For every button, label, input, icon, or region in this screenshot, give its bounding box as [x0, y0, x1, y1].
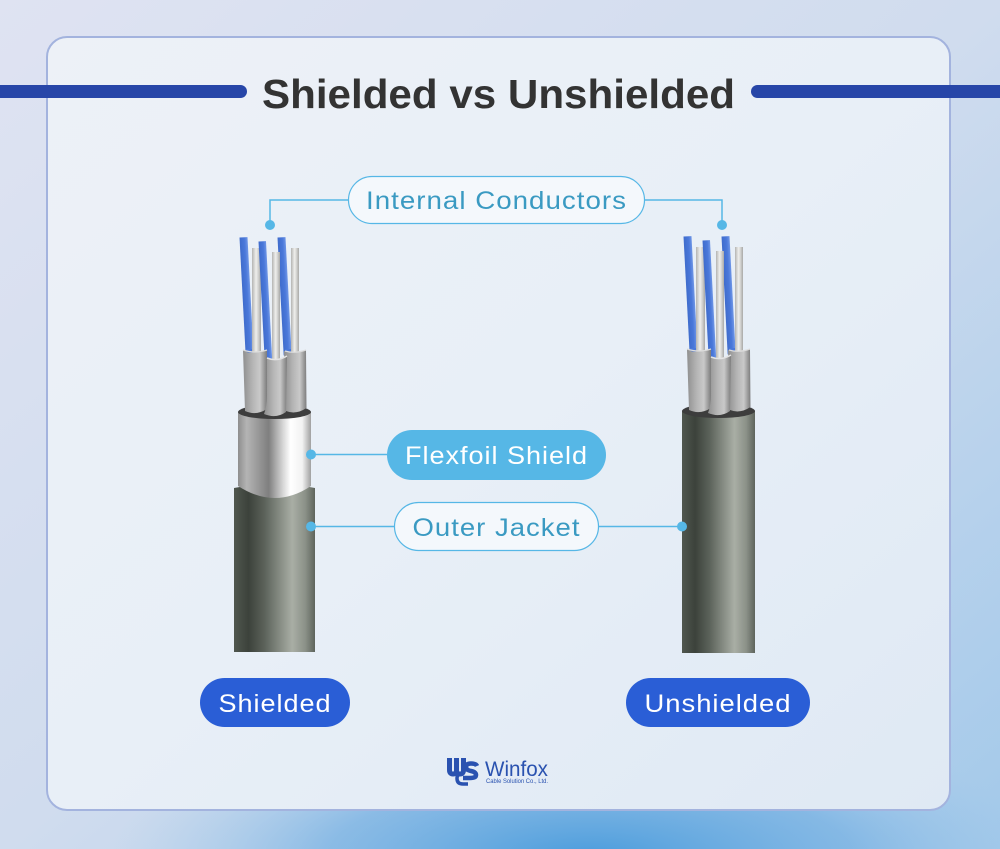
callout: outer jacket: Outer Jacket — [412, 514, 580, 542]
internal conductors — [684, 236, 750, 415]
callout: outer jacket — [306, 502, 687, 550]
logo: Winfox — [450, 758, 548, 785]
callout: internal conductors: Internal Conductors — [366, 187, 627, 215]
label: shielded: Shielded — [218, 690, 332, 718]
cable: shielded — [234, 237, 315, 652]
logo wordmark: Winfox — [485, 758, 548, 781]
logo tagline: Cable Solution Co., Ltd. — [486, 779, 548, 785]
label: unshielded — [626, 678, 810, 727]
cable: unshielded — [682, 236, 755, 653]
flexfoil shield — [238, 412, 311, 498]
icon: logo mark — [450, 758, 477, 784]
title bar right — [751, 85, 1000, 98]
callout: flexfoil shield — [306, 430, 606, 480]
title bar left — [0, 85, 247, 98]
title — [0, 71, 1000, 117]
label: unshielded: Unshielded — [644, 690, 792, 718]
label: shielded — [200, 678, 350, 727]
outer jacket — [682, 411, 755, 653]
title text: Shielded vs Unshielded — [262, 71, 735, 117]
callout: flexfoil shield: Flexfoil Shield — [405, 442, 588, 470]
callout: internal conductors — [265, 176, 727, 230]
outer jacket — [234, 484, 315, 652]
internal conductors — [240, 237, 306, 416]
